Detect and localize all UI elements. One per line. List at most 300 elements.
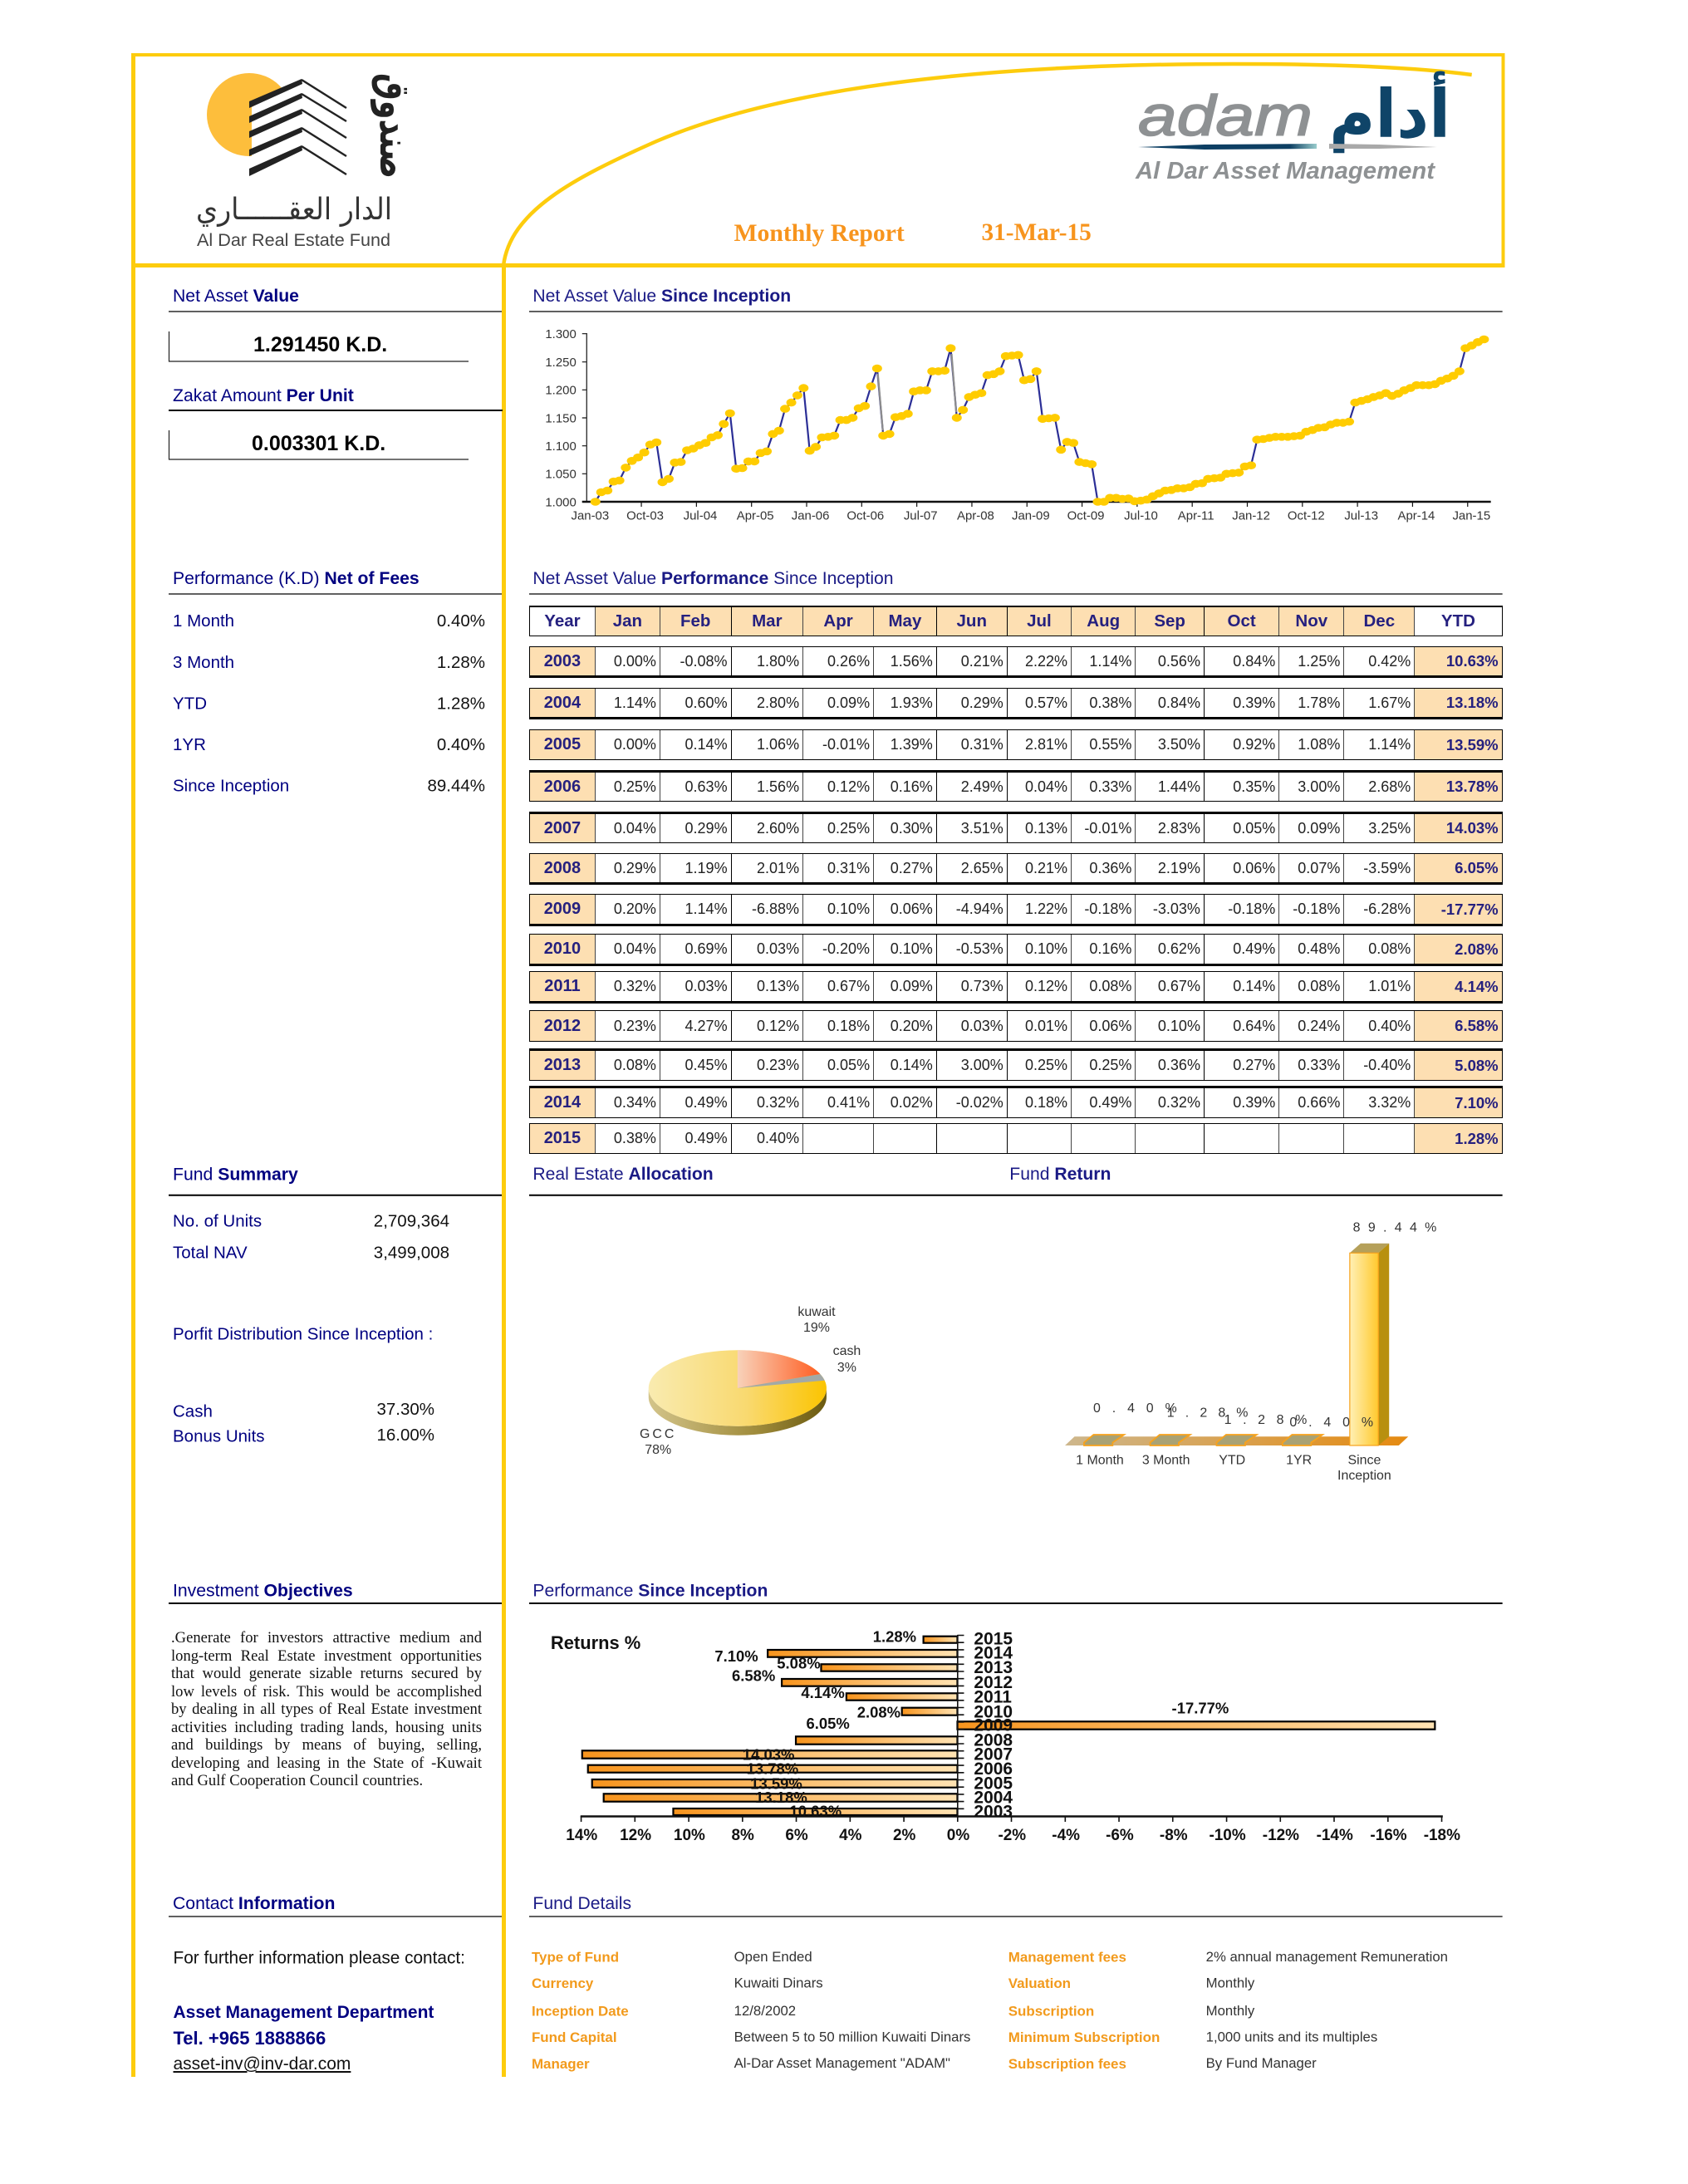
table row 2009 xyxy=(529,894,1503,926)
panel: fund summary: 37.30% xyxy=(376,1400,434,1419)
table row 2004: 1.14% xyxy=(614,694,656,711)
pie labels: GCC xyxy=(640,1427,676,1441)
table row 2006: 0.35% xyxy=(1233,778,1275,794)
table row 2008: 0.36% xyxy=(1089,859,1131,876)
table row 2007: 0.25% xyxy=(827,819,870,836)
table row 2004: 0.39% xyxy=(1233,694,1275,711)
panel: fund details: Currency xyxy=(532,1975,594,1991)
table row 2007: 14.03% xyxy=(1446,819,1499,837)
table row 2015: 0.49% xyxy=(685,1130,728,1146)
x axis percent labels: -16% xyxy=(1370,1827,1407,1844)
table row 2015: 2015 xyxy=(544,1129,581,1147)
table row 2010: 0.08% xyxy=(1368,940,1411,957)
year labels: 2005 xyxy=(974,1774,1013,1793)
table row 2003: 1.80% xyxy=(757,653,799,670)
table row 2003: 0.42% xyxy=(1368,653,1411,670)
table row 2013: 0.08% xyxy=(614,1057,656,1073)
x axis percent labels: -18% xyxy=(1424,1827,1460,1844)
x axis labels: Jan-06 xyxy=(792,509,829,523)
panel: performance net of fees: 0.40% xyxy=(437,735,485,754)
panel: zakat amount xyxy=(169,386,503,459)
table row 2011: 0.32% xyxy=(614,978,656,994)
x axis percent labels: -6% xyxy=(1106,1827,1134,1844)
table row 2009: -0.18% xyxy=(1293,901,1340,917)
table header row: Nov xyxy=(1295,611,1327,631)
table row 2003: 10.63% xyxy=(1446,652,1499,670)
table row 2013: 5.08% xyxy=(1455,1057,1499,1073)
panel: zakat amount: Zakat Amount Per Unit xyxy=(173,386,354,405)
table row 2004: 0.57% xyxy=(1025,694,1067,711)
table row 2013: 0.36% xyxy=(1158,1057,1200,1073)
panel: contact information: For further information please contact: xyxy=(173,1949,465,1968)
table row 2008: 6.05% xyxy=(1455,859,1499,876)
pie side xyxy=(649,1388,827,1436)
panel: fund details: Management fees xyxy=(1008,1950,1126,1966)
year labels xyxy=(974,1629,1013,1822)
x axis labels: Jan-15 xyxy=(1452,509,1490,523)
panel: fund details: Open Ended xyxy=(734,1949,812,1965)
bar value labels: 13.78% xyxy=(747,1760,798,1778)
table row 2013: 3.00% xyxy=(961,1057,1003,1073)
table row 2013: 0.27% xyxy=(1233,1057,1275,1073)
table row 2009: -0.18% xyxy=(1228,901,1275,917)
panel: fund summary xyxy=(169,1166,502,1446)
x axis labels: Jul-04 xyxy=(684,509,717,523)
table row 2006: 2.68% xyxy=(1368,778,1411,794)
x axis labels: Jan-12 xyxy=(1232,509,1270,523)
table row 2009: 1.22% xyxy=(1025,901,1067,917)
year labels: 2007 xyxy=(974,1745,1013,1764)
panel: performance net of fees: 1 Month xyxy=(173,611,234,631)
table row 2005: -0.01% xyxy=(822,736,870,753)
panel: fund return 3D bars: 1.28% xyxy=(1167,1406,1248,1421)
panel: performance net of fees: YTD xyxy=(173,694,207,714)
table row 2014: 0.66% xyxy=(1298,1094,1340,1111)
chart axes xyxy=(582,333,1491,507)
table row 2005: 3.50% xyxy=(1158,736,1200,753)
table row 2013: 0.33% xyxy=(1298,1057,1340,1073)
panel: NAV since inception line chart: Net Asset Value Since Inception xyxy=(532,287,791,306)
x axis labels: Oct-12 xyxy=(1288,509,1325,523)
table row 2014: 7.10% xyxy=(1455,1093,1499,1112)
small bars xyxy=(1084,1435,1322,1445)
table row 2010: 0.49% xyxy=(1233,940,1275,957)
table row 2011: 0.67% xyxy=(1158,978,1200,994)
panel: performance net of fees: 0.40% xyxy=(437,611,485,631)
table header row: Apr xyxy=(823,611,853,631)
x axis labels: Apr-08 xyxy=(957,509,994,523)
table row 2010: 0.16% xyxy=(1089,940,1131,957)
table header row: Jul xyxy=(1027,611,1052,631)
category labels xyxy=(1076,1453,1391,1483)
table row 2010 xyxy=(529,934,1503,966)
table row 2014 xyxy=(529,1086,1503,1118)
panel: performance net of fees: 1.28% xyxy=(437,694,485,714)
logo: Al Dar Real Estate Fund: الدار العقــــــاري xyxy=(196,193,392,227)
x axis percent labels: 8% xyxy=(732,1827,754,1844)
category labels: YTD xyxy=(1219,1453,1245,1467)
investment objectives text: that would generate sizable returns secured by xyxy=(171,1665,482,1682)
table row 2010: -0.20% xyxy=(822,940,870,957)
x axis labels: Apr-14 xyxy=(1397,509,1435,523)
x axis labels: Jul-07 xyxy=(904,509,938,523)
chart floor xyxy=(1065,1436,1408,1445)
panel: fund details: Kuwaiti Dinars xyxy=(734,1975,823,1991)
panel: fund return 3D bars: 89.44% xyxy=(1353,1220,1436,1234)
panel: fund summary: 16.00% xyxy=(376,1426,434,1445)
table row 2012: 0.03% xyxy=(961,1017,1003,1033)
table row 2011: 0.73% xyxy=(961,978,1003,994)
table row 2006: 2.49% xyxy=(961,778,1003,794)
table row 2008 xyxy=(529,853,1503,885)
investment objectives text: by dealing in all types of Real Estate investment xyxy=(171,1701,482,1718)
table row 2008: 0.27% xyxy=(891,859,933,876)
category labels: 3 Month xyxy=(1142,1453,1190,1467)
bars xyxy=(582,1637,1435,1815)
table row 2012: 0.01% xyxy=(1025,1017,1067,1033)
table row 2012 xyxy=(529,1010,1503,1042)
table row 2003: -0.08% xyxy=(680,653,728,670)
table row 2012: 0.64% xyxy=(1233,1017,1275,1033)
logo: Al Dar Real Estate Fund: Al Dar Real Estate Fund xyxy=(197,231,390,250)
table row 2010: 0.04% xyxy=(614,940,656,957)
table row 2013: 2013 xyxy=(544,1056,581,1074)
table row 2007: 0.09% xyxy=(1298,819,1340,836)
table row 2006: 0.63% xyxy=(685,778,728,794)
table row 2009: -17.77% xyxy=(1441,901,1499,917)
table row 2004: 0.09% xyxy=(827,694,870,711)
y axis labels xyxy=(545,327,577,509)
panel: fund details: Monthly xyxy=(1206,2003,1255,2019)
table row 2007: 0.04% xyxy=(614,819,656,836)
panel: fund details: Al-Dar Asset Management "ADAM" xyxy=(734,2055,950,2071)
table row 2003: 0.00% xyxy=(614,653,656,670)
logo: adam: adam xyxy=(1138,84,1313,148)
panel: fund summary: Bonus Units xyxy=(173,1427,265,1446)
x axis percent labels: 4% xyxy=(839,1827,862,1844)
table row 2008: 0.07% xyxy=(1298,859,1340,876)
y axis labels: 1.200 xyxy=(545,384,577,398)
chart title: Returns % xyxy=(551,1632,640,1653)
category labels: 1 Month xyxy=(1076,1453,1124,1467)
table row 2011: 0.14% xyxy=(1233,978,1275,994)
table row 2014: 0.49% xyxy=(685,1094,728,1111)
panel: contact information: asset-inv@inv-dar.com xyxy=(173,2054,351,2074)
x axis percent labels: -8% xyxy=(1160,1827,1188,1844)
x axis percent labels: 2% xyxy=(893,1827,915,1844)
table row 2014: 0.18% xyxy=(1025,1094,1067,1111)
table row 2015: 0.40% xyxy=(757,1130,799,1146)
logo: Al Dar Real Estate Fund xyxy=(196,73,419,250)
table row 2010: 0.10% xyxy=(1025,940,1067,957)
panel: net asset value: Net Asset Value xyxy=(173,287,299,306)
pie labels: kuwait xyxy=(797,1305,836,1319)
panel: fund details: Type of Fund xyxy=(532,1950,619,1966)
table row 2005 xyxy=(529,729,1503,760)
table row 2015: 0.38% xyxy=(614,1130,656,1146)
table row 2005: 0.31% xyxy=(961,736,1003,753)
table header row: Mar xyxy=(752,611,783,631)
panel: performance net of fees: 1.28% xyxy=(437,653,485,672)
table row 2005: 1.14% xyxy=(1368,736,1411,753)
table row 2013: 0.25% xyxy=(1089,1057,1131,1073)
table row 2010: 0.03% xyxy=(757,940,799,957)
table header row: Jun xyxy=(957,611,987,631)
x axis percent labels: -10% xyxy=(1209,1827,1246,1844)
table row 2004 xyxy=(529,688,1503,719)
panel: performance net of fees: 3 Month xyxy=(173,653,234,672)
heading: investment objectives: Investment Objectives xyxy=(173,1582,353,1601)
panel: fund details: 12/8/2002 xyxy=(734,2003,796,2019)
table row 2010: 2010 xyxy=(544,940,581,958)
table row 2012: 0.06% xyxy=(1089,1017,1131,1033)
table header row: Sep xyxy=(1154,611,1185,631)
panel: performance net of fees: Since Inception xyxy=(173,777,289,796)
panel: fund details: Inception Date xyxy=(532,2004,629,2020)
year labels: 2013 xyxy=(974,1658,1013,1677)
table row 2006: 0.25% xyxy=(614,778,656,794)
x axis labels: Oct-03 xyxy=(626,509,664,523)
bar value labels: 5.08% xyxy=(777,1655,821,1672)
table row 2013 xyxy=(529,1048,1503,1081)
table row 2007: -0.01% xyxy=(1084,819,1131,836)
report title xyxy=(734,219,1092,247)
heading: NAV performance table: Net Asset Value Performance Since Inception xyxy=(532,569,894,588)
table row 2003: 0.84% xyxy=(1233,653,1275,670)
table row 2010: 0.48% xyxy=(1298,940,1340,957)
table header row: Jan xyxy=(613,611,642,631)
table row 2012: 4.27% xyxy=(685,1017,728,1033)
table row 2004: 1.67% xyxy=(1368,694,1411,711)
table row 2005: 2.81% xyxy=(1025,736,1067,753)
panel: contact information: Contact Information xyxy=(173,1894,335,1913)
table row 2006 xyxy=(529,770,1503,802)
table row 2004: 0.60% xyxy=(685,694,728,711)
table row 2006: 13.78% xyxy=(1446,778,1499,795)
x axis percent labels: -14% xyxy=(1317,1827,1353,1844)
table header row: YTD xyxy=(1441,611,1475,631)
table row 2014: 0.32% xyxy=(757,1094,799,1111)
logo: Al Dar Real Estate Fund: صندوق xyxy=(370,73,419,179)
bar value labels: 13.18% xyxy=(755,1789,807,1806)
panel: contact information: Asset Management Department xyxy=(173,2003,434,2022)
table row 2011: 0.13% xyxy=(757,978,799,994)
table row 2004: 2.80% xyxy=(757,694,799,711)
panel: zakat amount: 0.003301 K.D. xyxy=(252,432,385,455)
pie labels: 78% xyxy=(645,1443,671,1457)
pie slice: GCC xyxy=(649,1350,827,1426)
x axis percent labels: -12% xyxy=(1263,1827,1299,1844)
table row 2007: 0.30% xyxy=(891,819,933,836)
investment objectives text xyxy=(171,1629,482,1789)
panel: performance net of fees xyxy=(169,569,502,796)
investment objectives text: developing and leasing in the State of -Kuwait xyxy=(171,1755,482,1771)
table row 2008: 2008 xyxy=(544,859,581,877)
panel: contact information xyxy=(169,1894,502,2074)
table row 2008: 0.06% xyxy=(1233,859,1275,876)
panel: performance net of fees: 1YR xyxy=(173,735,206,754)
table header row: Oct xyxy=(1228,611,1256,631)
table row 2009: 2009 xyxy=(544,900,581,918)
panel: fund return 3D bars: 1.28% xyxy=(1224,1413,1307,1427)
x axis labels: Jul-10 xyxy=(1124,509,1158,523)
investment objectives text: and Gulf Cooperation Council countries. xyxy=(171,1772,423,1789)
x axis percent labels: 0% xyxy=(947,1827,969,1844)
table row 2006: 1.56% xyxy=(757,778,799,794)
panel: fund summary: Cash xyxy=(173,1402,213,1421)
bar value labels: 4.14% xyxy=(801,1684,845,1701)
table row 2003: 0.21% xyxy=(961,653,1003,670)
table row 2013: 0.25% xyxy=(1025,1057,1067,1073)
x axis labels: Jan-03 xyxy=(571,509,609,523)
table row 2003: 0.56% xyxy=(1158,653,1200,670)
x axis labels: Apr-05 xyxy=(737,509,774,523)
table row 2011: 0.09% xyxy=(891,978,933,994)
pie labels: 3% xyxy=(837,1361,856,1375)
year labels: 2015 xyxy=(974,1629,1013,1648)
table row 2011: 1.01% xyxy=(1368,978,1411,994)
table row 2003: 0.26% xyxy=(827,653,870,670)
table row 2009: -6.28% xyxy=(1363,901,1411,917)
table row 2009: -3.03% xyxy=(1153,901,1200,917)
table row 2012: 0.10% xyxy=(1158,1017,1200,1033)
panel: fund details: Valuation xyxy=(1008,1975,1071,1991)
category labels: 1YR xyxy=(1286,1453,1312,1467)
NAV line with monthly markers xyxy=(596,339,1484,502)
x axis percent labels xyxy=(566,1827,1460,1844)
table header row: Feb xyxy=(680,611,710,631)
panel: net asset value xyxy=(169,287,502,361)
year labels: 2003 xyxy=(974,1802,1013,1822)
table row 2012: 6.58% xyxy=(1455,1017,1499,1034)
table row 2007: 2.60% xyxy=(757,819,799,836)
report frame xyxy=(131,53,1504,2077)
table row 2012: 0.24% xyxy=(1298,1017,1340,1033)
table row 2007: 2.83% xyxy=(1158,819,1200,836)
panel: fund details: Fund Details xyxy=(532,1894,631,1913)
table row 2007 xyxy=(529,812,1503,843)
panel: real estate allocation pie: Real Estate Allocation xyxy=(532,1165,714,1184)
table row 2003: 2003 xyxy=(544,651,581,670)
table row 2003: 2.22% xyxy=(1025,653,1067,670)
table row 2011: 0.67% xyxy=(827,978,870,994)
bar value labels: 6.58% xyxy=(732,1666,775,1684)
table row 2007: 2007 xyxy=(544,819,581,837)
bar value labels: 14.03% xyxy=(743,1745,794,1763)
x axis labels: Oct-06 xyxy=(846,509,884,523)
bar value labels: 13.59% xyxy=(750,1774,802,1792)
table row 2007: 0.05% xyxy=(1233,819,1275,836)
panel: fund return 3D bars: Fund Return xyxy=(1009,1165,1111,1184)
year labels: 2008 xyxy=(974,1730,1013,1750)
table row 2012: 0.23% xyxy=(614,1017,656,1033)
bar value labels: -17.77% xyxy=(1172,1700,1229,1717)
table row 2006: 2006 xyxy=(544,778,581,796)
table row 2007: 0.13% xyxy=(1025,819,1067,836)
panel: fund summary: Porfit Distribution Since Inception : xyxy=(173,1325,433,1344)
table row 2004: 1.93% xyxy=(891,694,933,711)
table row 2015: 1.28% xyxy=(1455,1130,1499,1146)
table row 2009: 0.10% xyxy=(827,901,870,917)
table row 2005: 0.00% xyxy=(614,736,656,753)
x axis percent labels: -2% xyxy=(998,1827,1026,1844)
panel: fund return 3D bars xyxy=(1009,1165,1436,1483)
table row 2008: 2.19% xyxy=(1158,859,1200,876)
category labels: Since xyxy=(1347,1453,1381,1467)
table row 2014: 2014 xyxy=(544,1093,581,1112)
logo: adam: أدام xyxy=(1329,71,1450,154)
panel: fund details: 1,000 units and its multiples xyxy=(1206,2029,1377,2045)
table header row: Dec xyxy=(1363,611,1395,631)
year labels: 2004 xyxy=(974,1789,1013,1808)
panel: performance since inception bar chart: Performance Since Inception xyxy=(532,1582,768,1601)
y axis labels: 1.000 xyxy=(545,495,577,509)
table row 2014: 0.39% xyxy=(1233,1094,1275,1111)
table row 2004: 2004 xyxy=(544,693,581,711)
table row 2008: 0.21% xyxy=(1025,859,1067,876)
table row 2003 xyxy=(529,646,1503,678)
table row 2005: 0.14% xyxy=(685,736,728,753)
x axis labels: Jan-09 xyxy=(1012,509,1050,523)
investment objectives text: and buildings by means of buying, selling, xyxy=(171,1736,482,1754)
table row 2011: 0.12% xyxy=(1025,978,1067,994)
x axis percent labels: 14% xyxy=(566,1827,597,1844)
panel: fund details: Manager xyxy=(532,2056,590,2072)
x axis percent labels: 12% xyxy=(620,1827,651,1844)
table row 2015 xyxy=(529,1123,1503,1154)
pie labels: 19% xyxy=(803,1321,830,1335)
table header row xyxy=(529,606,1503,636)
x axis labels xyxy=(571,509,1490,523)
table row 2012: 2012 xyxy=(544,1017,581,1035)
table row 2004: 0.29% xyxy=(961,694,1003,711)
table row 2014: 0.41% xyxy=(827,1094,870,1111)
table row 2010: 2.08% xyxy=(1455,940,1499,957)
x axis percent labels: 10% xyxy=(674,1827,705,1844)
table row 2006: 0.12% xyxy=(827,778,870,794)
x axis labels: Oct-09 xyxy=(1067,509,1104,523)
table row 2008: 2.65% xyxy=(961,859,1003,876)
table row 2008: -3.59% xyxy=(1363,859,1411,876)
table row 2006: 0.04% xyxy=(1025,778,1067,794)
table: monthly NAV performance xyxy=(529,606,1503,1154)
investment objectives text: .Generate for investors attractive medium and xyxy=(171,1629,482,1647)
pie labels xyxy=(640,1305,861,1457)
pie slice: kuwait xyxy=(738,1350,820,1388)
investment objectives text: long-term Real Estate investment opportunities xyxy=(171,1647,482,1665)
table row 2004: 0.84% xyxy=(1158,694,1200,711)
table row 2008: 1.19% xyxy=(685,859,728,876)
table row 2007: 3.25% xyxy=(1368,819,1411,836)
panel: fund details: 2% annual management Remuneration xyxy=(1206,1949,1448,1965)
table row 2006: 3.00% xyxy=(1298,778,1340,794)
table row 2014: 0.49% xyxy=(1089,1094,1131,1111)
table row 2010: 0.69% xyxy=(685,940,728,957)
table row 2012: 0.12% xyxy=(757,1017,799,1033)
panel: fund details: By Fund Manager xyxy=(1206,2055,1317,2071)
table row 2004: 1.78% xyxy=(1298,694,1340,711)
y axis labels: 1.050 xyxy=(545,468,577,482)
table row 2006: 0.16% xyxy=(891,778,933,794)
panel: performance since inception bar chart xyxy=(529,1582,1503,1844)
table row 2014: 0.32% xyxy=(1158,1094,1200,1111)
logo: adam xyxy=(1135,71,1450,184)
year labels: 2009 xyxy=(974,1715,1013,1735)
panel: performance net of fees: 89.44% xyxy=(427,777,485,796)
y axis labels: 1.300 xyxy=(545,327,577,341)
panel: fund summary: 3,499,008 xyxy=(374,1243,449,1262)
category labels: Inception xyxy=(1337,1469,1391,1483)
